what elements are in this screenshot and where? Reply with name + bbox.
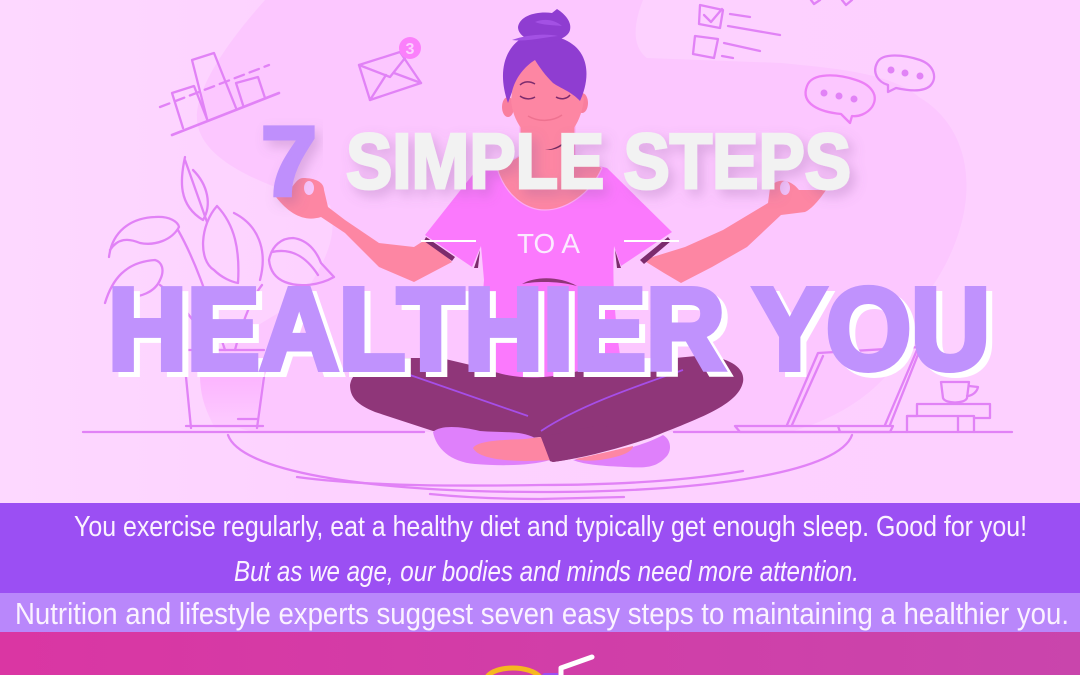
face	[511, 58, 584, 144]
character: woman meditating	[276, 9, 826, 467]
subtitle rule left	[421, 240, 476, 242]
line icons	[83, 0, 1012, 499]
right sock	[573, 435, 670, 467]
subtitle rule right	[624, 240, 679, 242]
eyes and brows	[520, 82, 570, 99]
icon: potted plant	[105, 157, 334, 428]
floor line right	[674, 431, 1012, 433]
title: healthier you: HEALTHIER YOU	[108, 264, 990, 394]
background blob	[197, 0, 966, 432]
ear left	[502, 97, 514, 117]
sleeve trims	[424, 237, 671, 268]
shirt	[425, 160, 672, 377]
left foot	[473, 437, 550, 461]
ear right	[576, 93, 588, 113]
hair highlight	[512, 20, 562, 41]
icon: books and cup	[907, 382, 990, 432]
waist shadow	[522, 278, 577, 286]
leg seam lines	[410, 370, 683, 431]
neck	[497, 125, 602, 210]
left arm	[276, 178, 452, 282]
icon: checklist	[693, 0, 852, 58]
right arm	[643, 181, 826, 283]
intro band	[0, 503, 1080, 593]
title: simple steps: SIMPLE STEPS	[346, 117, 851, 205]
pot gradient	[200, 375, 262, 428]
subtitle: TO A	[517, 228, 580, 259]
left sock	[433, 427, 550, 465]
right foot	[575, 446, 633, 461]
hand holes	[304, 181, 314, 195]
hero background	[0, 0, 1080, 503]
hair bun	[518, 9, 570, 42]
lower band	[0, 632, 1080, 675]
chin shadow	[545, 139, 566, 150]
smile	[528, 115, 562, 120]
icon: rug	[228, 435, 852, 499]
left leg overlap	[541, 425, 650, 462]
icon: large speech bubble	[806, 75, 875, 123]
title shadow: HEALTHIER YOU	[114, 269, 996, 399]
intro text line 2: But as we age, our bodies and minds need more attention.	[234, 556, 859, 588]
icon: laptop	[735, 347, 921, 432]
highlight band	[0, 593, 1080, 632]
icon: drink with straw, cropped	[487, 657, 592, 675]
title number 7: 7	[261, 106, 317, 216]
hair	[503, 35, 586, 103]
legs	[350, 355, 743, 462]
icon: envelope with badge: 3	[406, 41, 415, 58]
icon: envelope with badge	[359, 37, 421, 100]
floor line left	[83, 431, 424, 433]
icon: bar chart	[160, 53, 279, 135]
title	[108, 106, 996, 399]
icon: small speech bubble	[875, 56, 934, 92]
